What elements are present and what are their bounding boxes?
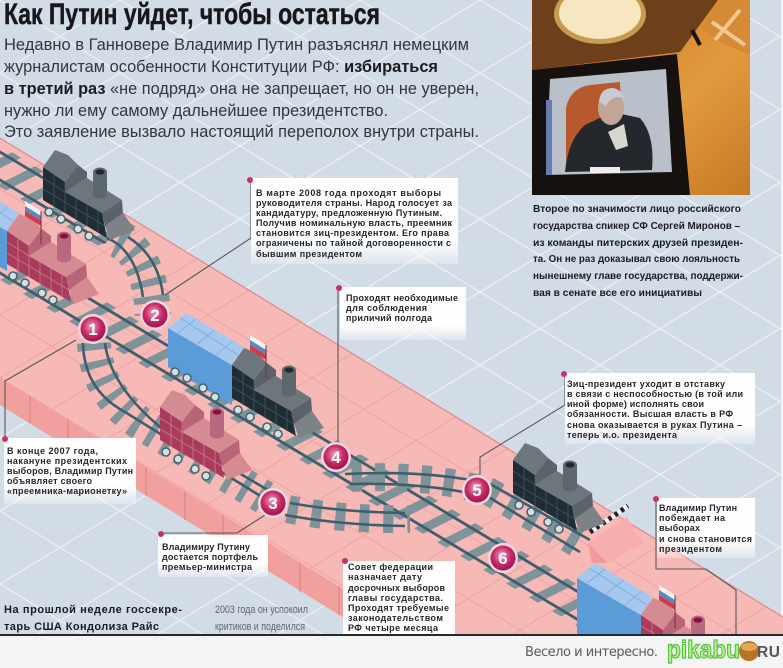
callout: victory: выборах xyxy=(659,523,700,533)
callout: prime minister: Владимиру Путину xyxy=(162,542,250,552)
callout: March 2008: бывшим президентом xyxy=(256,249,362,259)
callout: March 2008: руководителя страны. Народ голосует за xyxy=(256,198,453,208)
callout: federation council: законодательством xyxy=(348,613,443,623)
marker 2 xyxy=(140,300,170,330)
callout: federation council: Совет федерации xyxy=(348,562,433,572)
buffer stop xyxy=(588,506,643,563)
callout: end of 2007: В конце 2007 года, xyxy=(7,446,98,456)
callout: half-year: для соблюдения xyxy=(346,303,427,313)
callout: resignation: в связи с неспособностью (в той или xyxy=(567,389,743,399)
upper track xyxy=(0,142,163,315)
footer bar xyxy=(0,634,783,668)
callout: March 2008: ограничены по тайной договоренности с xyxy=(256,238,451,248)
photo caption: из команды питерских друзей президен- xyxy=(533,237,743,249)
bottom article text right: 2003 года он успокоил xyxy=(215,604,308,616)
callout: victory: президентом xyxy=(659,544,722,554)
marker 4: 4 xyxy=(331,448,341,467)
marker 5 xyxy=(462,475,492,505)
bottom article text left: На прошлой неделе госсекре- xyxy=(4,604,182,616)
callout: resignation xyxy=(561,371,755,444)
callout: resignation: обязанности. Высшая власть в РФ xyxy=(567,409,733,419)
wagon and red locomotive 3 xyxy=(577,563,705,636)
leader lines xyxy=(5,179,736,634)
callout: prime minister: достается портфель xyxy=(162,552,258,562)
intro text: Недавно в Ганновере Владимир Путин разъяснял немецким xyxy=(4,35,469,54)
callout: March 2008: становится зиц-президентом. Его права xyxy=(256,228,450,238)
callout: federation council: назначает дату xyxy=(348,572,422,582)
callout: March 2008: В марте 2008 года проходят выборы xyxy=(256,188,441,198)
locomotive 1 grey xyxy=(43,150,135,240)
marker 3 xyxy=(258,488,288,518)
callout: federation council: главы государства. xyxy=(348,593,443,603)
callout: resignation: иной форме) исполнять свои xyxy=(567,399,704,409)
callout: federation council: РФ четыре месяца xyxy=(348,623,439,633)
callout: March 2008 xyxy=(247,177,458,264)
callout: federation council: досрочных выборов xyxy=(348,583,445,593)
marker 2: 2 xyxy=(150,306,160,325)
bottom article text right xyxy=(215,604,308,633)
callout: end of 2007: «преемника-марионетку» xyxy=(7,486,127,496)
callout: prime minister: премьер-министра xyxy=(162,562,253,572)
branch track to locomotive 3 xyxy=(345,473,590,552)
footer slogan: Весело и интересно. xyxy=(525,645,658,660)
callout: federation council: Проходят требуемые xyxy=(348,603,449,613)
photo caption: нынешнему главе государства, поддержи- xyxy=(533,270,743,282)
photo caption: государства спикер СФ Сергей Миронов – xyxy=(533,220,740,232)
callout: victory: побеждает на xyxy=(659,513,726,523)
main track xyxy=(0,223,653,649)
callout: resignation: Зиц-президент уходит в отставку xyxy=(567,379,725,389)
marker 5: 5 xyxy=(472,481,482,500)
callout: victory xyxy=(653,496,755,558)
callout: half-year: Проходят необходимые xyxy=(346,293,458,303)
marker 6 xyxy=(488,543,518,573)
photo: speaker on TV xyxy=(532,0,750,195)
photo caption: та. Он не раз доказывал свою лояльность xyxy=(533,253,740,265)
callout: resignation: снова оказывается в руках Путина – xyxy=(567,420,742,430)
marker 1: 1 xyxy=(88,320,98,339)
callout: March 2008: кандидатуру, предложенную Путиным. xyxy=(256,208,442,218)
pikabu logo: RU xyxy=(757,644,780,661)
intro text: журналистам особенности Конституции РФ: избираться xyxy=(4,57,438,76)
callout: end of 2007: накануне президентских xyxy=(7,456,127,466)
callout: prime minister xyxy=(158,531,268,577)
photo caption: вая в сенате все его инициативы xyxy=(533,287,702,299)
marker 6: 6 xyxy=(498,549,508,568)
intro text: нужно ли ему самому дальнейшее президентство. xyxy=(4,101,388,120)
callout: end of 2007: объявляет своего xyxy=(7,476,92,486)
wagon and red locomotive 1 xyxy=(0,179,99,304)
bottom article text left xyxy=(4,604,182,633)
intro text: Это заявление вызвало настоящий переполох внутри страны. xyxy=(4,122,479,141)
photo caption: Второе по значимости лицо российского xyxy=(533,203,741,215)
callout: half-year: приличий полгода xyxy=(346,313,433,323)
callout: end of 2007: выборов, Владимир Путин xyxy=(7,466,133,476)
bottom article text right: критиков и поделился xyxy=(215,621,305,633)
callout: victory: и снова становится xyxy=(659,534,752,544)
lower curved track xyxy=(83,343,410,526)
marker 1 xyxy=(78,314,108,344)
callout: victory: Владимир Путин xyxy=(659,503,737,513)
pikabu logo: pikabu xyxy=(667,636,740,664)
callout: end of 2007 xyxy=(2,436,136,504)
marker 4 xyxy=(321,442,351,472)
right edge strip xyxy=(781,0,783,634)
callout: resignation: теперь и.о. президента xyxy=(567,430,678,440)
intro text xyxy=(4,35,479,141)
wagon and grey locomotive 2 xyxy=(168,313,324,438)
red locomotive 2 xyxy=(160,390,252,480)
callout: half-year xyxy=(336,285,466,340)
callout: federation council xyxy=(342,558,455,634)
grey locomotive 3 xyxy=(513,443,605,533)
photo caption xyxy=(533,203,743,299)
callout: March 2008: Получив номинальную власть, преемник xyxy=(256,218,452,228)
marker 3: 3 xyxy=(268,494,278,513)
intro text: в третий раз «не подряд» она не запрещает, но он не уверен, xyxy=(4,79,479,98)
bottom article text left: тарь США Кондолиза Райс xyxy=(4,621,159,633)
platform side wall xyxy=(0,377,416,634)
platform top xyxy=(0,138,783,634)
